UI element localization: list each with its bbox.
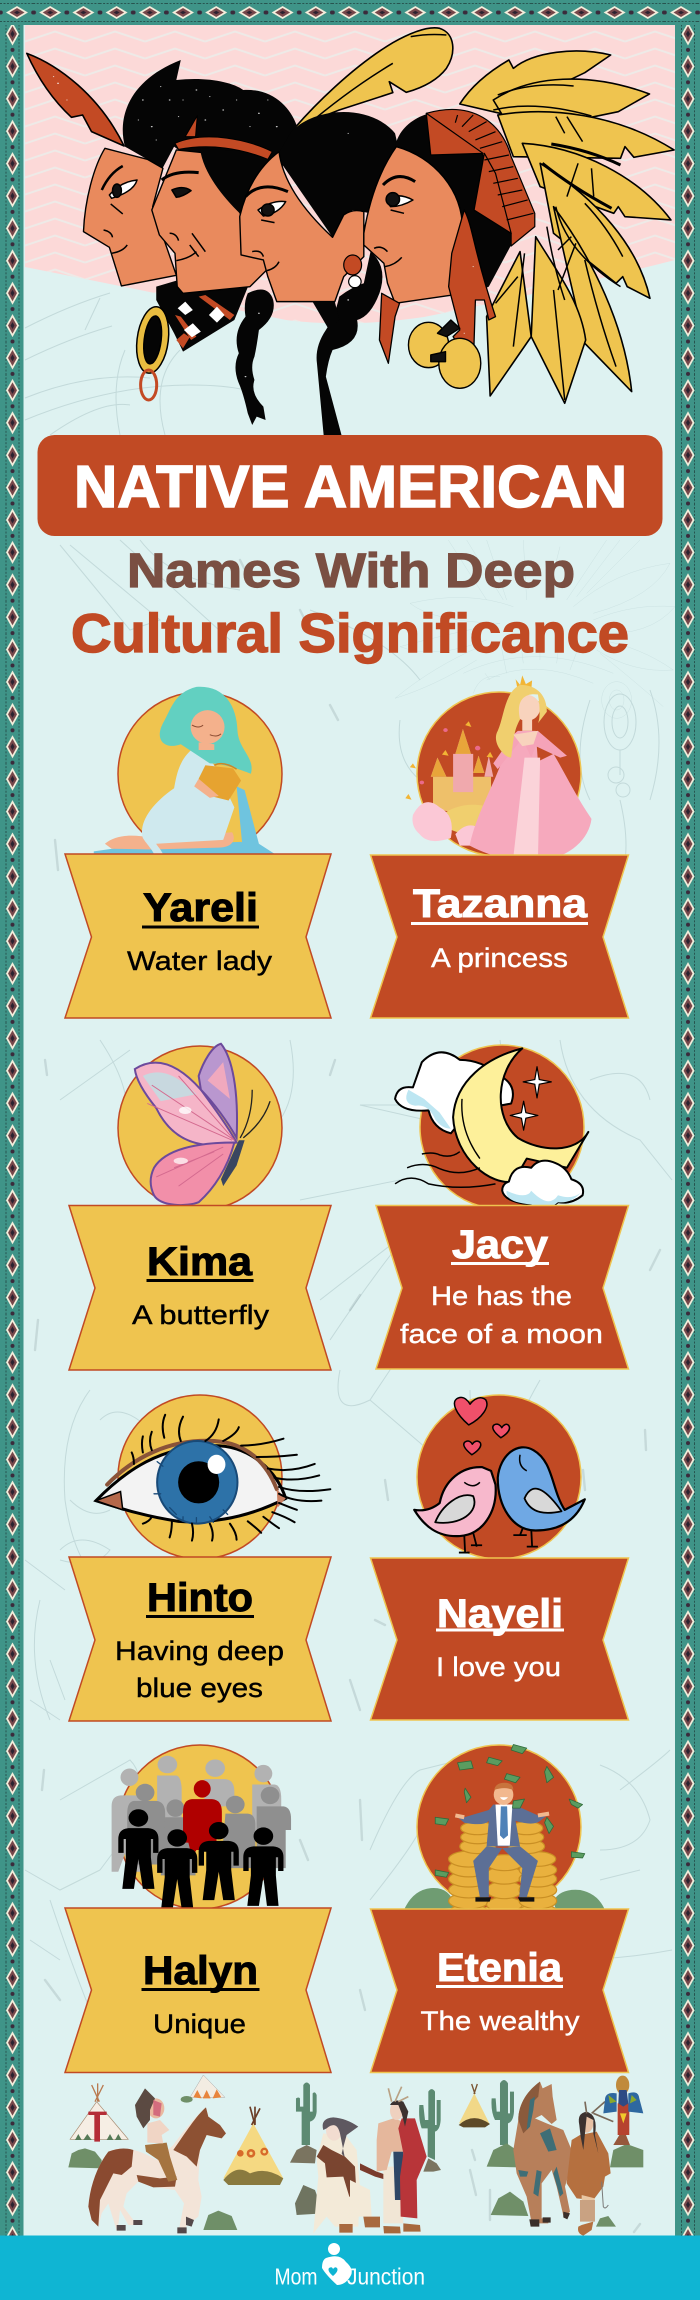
- meaning: He has the face of a moon: He has the: [431, 1281, 572, 1311]
- banner: red: [376, 1206, 628, 1369]
- pale line art and marble texture: [25, 293, 675, 2232]
- second head features: [162, 172, 205, 261]
- first head features: [102, 166, 137, 253]
- cactus right: [491, 2080, 514, 2145]
- shrubs: [487, 2143, 520, 2167]
- braids: [235, 252, 382, 435]
- headband: [175, 116, 272, 159]
- rider: [145, 2143, 177, 2182]
- cactus: [419, 2089, 441, 2160]
- banner: red: [370, 855, 628, 1018]
- decorative frame: top band: [0, 0, 700, 25]
- cactus: [296, 2082, 317, 2145]
- card: Nayeli: [370, 1395, 628, 1720]
- banner: red: [370, 1558, 628, 1720]
- totem pole: [613, 2128, 630, 2145]
- yellow teepee: [223, 2123, 283, 2178]
- icon: love birds: [414, 1397, 585, 1553]
- subtitle line two: Cultural Significance: [71, 602, 629, 664]
- white teepee: [70, 2102, 128, 2139]
- meaning: I love you: I love you: [436, 1652, 561, 1682]
- woman with pup: [313, 2133, 360, 2233]
- banner: yellow: [65, 1908, 331, 2072]
- logo wordmark: Junction: Junction: [347, 2264, 425, 2290]
- fourth face: [364, 147, 467, 303]
- illustration: four native american heads with feathers: [27, 28, 674, 435]
- name: Tazanna: Tazanna: [413, 882, 588, 926]
- title banner: [38, 435, 662, 536]
- logo: MomJunction: [274, 2243, 425, 2290]
- circle: red: [417, 1395, 581, 1559]
- pink zigzag backdrop: [25, 25, 675, 335]
- dry shrub: [295, 2185, 323, 2215]
- fourth head hair: [395, 112, 511, 300]
- meaning: He has the face of a moon: [400, 1281, 603, 1349]
- headdress feathers: [290, 28, 674, 403]
- card: Halyn: [65, 1745, 331, 2072]
- brown horse: [513, 2082, 572, 2223]
- small teepee: [459, 2093, 489, 2123]
- subtitle line one: Names With Deep: [127, 545, 575, 598]
- icon: butterfly: [135, 1044, 270, 1205]
- horse: [88, 2107, 226, 2233]
- circle: yellow: [118, 1745, 282, 1909]
- headdress feather veins: [304, 34, 623, 400]
- name: Halyn: Halyn: [143, 1949, 258, 1993]
- name: Etenia: Etenia: [437, 1946, 563, 1990]
- circle: red: [417, 1745, 581, 1909]
- footer bar: [0, 2236, 700, 2300]
- circle: red: [420, 1045, 584, 1209]
- name: Hinto: Hinto: [147, 1576, 253, 1620]
- meaning: Having deep blue eyes: Having deep: [115, 1636, 284, 1666]
- card: Etenia: [370, 1745, 628, 2072]
- meaning: A butterfly: A butterfly: [132, 1300, 270, 1330]
- second face: [152, 150, 270, 293]
- meaning: The wealthy: The wealthy: [420, 2006, 580, 2036]
- icon: crowd with one red figure: [112, 1756, 291, 1909]
- hanging red feathers: [379, 210, 496, 370]
- decorative frame: left band: [0, 25, 24, 2236]
- first face: [83, 148, 176, 286]
- paint speckles: [53, 76, 474, 377]
- circle: yellow: [118, 692, 282, 856]
- shrubs: [68, 2148, 102, 2168]
- first and second head hair: [123, 60, 297, 220]
- small teepee top: [190, 2075, 225, 2097]
- logo wordmark: Mom: Mom: [274, 2264, 318, 2290]
- rifle: [360, 2163, 407, 2185]
- card: Yareli: [65, 687, 331, 1018]
- name: Jacy: Jacy: [452, 1223, 549, 1267]
- illustration: watercolor scene right: [350, 2076, 643, 2236]
- second head hair wedge: [200, 148, 275, 213]
- yellow disc ornaments: [408, 320, 481, 388]
- third head hair: [277, 112, 404, 237]
- meaning: He has the face of a moon: face of a moon: [400, 1319, 603, 1349]
- icon: water lady: [94, 687, 277, 874]
- name: Yareli: Yareli: [143, 886, 258, 930]
- third face: [240, 152, 364, 302]
- fourth head features: [374, 177, 415, 267]
- name: Nayeli: Nayeli: [437, 1592, 563, 1636]
- icon: princess and castle: [405, 675, 591, 862]
- card: Hinto: [69, 1395, 331, 1721]
- circle: yellow: [118, 1395, 282, 1559]
- native figure with hook: [567, 2132, 611, 2200]
- circle: yellow: [118, 1046, 282, 1210]
- icon: wealthy man on gold coins: [404, 1745, 605, 1920]
- name: Kima: Kima: [147, 1240, 253, 1284]
- meaning: Having deep blue eyes: blue eyes: [136, 1673, 263, 1703]
- necklace and neck: [156, 280, 248, 352]
- title banner: NATIVE AMERICAN: [74, 454, 627, 520]
- icon: crescent moon with clouds: [395, 1048, 588, 1209]
- man: [383, 2167, 403, 2223]
- third head features: [246, 187, 288, 271]
- card: Kima: [69, 1044, 331, 1370]
- meaning: Water lady: Water lady: [127, 946, 273, 976]
- banner: yellow: [65, 854, 331, 1018]
- left red feather: [27, 53, 124, 146]
- circle: red: [417, 692, 581, 856]
- card: Tazanna: [370, 675, 628, 1018]
- banner: yellow: [69, 1206, 331, 1370]
- woman pup rest: [350, 2180, 372, 2217]
- pale war bonnet line art behind the title: [395, 540, 675, 718]
- third head earring: [344, 255, 362, 288]
- icon: blue eye: [96, 1415, 330, 1541]
- round earring ring: [133, 306, 172, 400]
- illustration: watercolor scene left: [68, 2075, 360, 2233]
- striped headdress band: [426, 110, 535, 246]
- banner: red: [370, 1909, 628, 2072]
- card: Jacy: [376, 1045, 628, 1369]
- logo icon: mother and child: [322, 2243, 352, 2285]
- meaning: Unique: Unique: [153, 2009, 246, 2039]
- banner: yellow: [69, 1557, 331, 1721]
- meaning: A princess: A princess: [431, 943, 568, 973]
- meaning: Having deep blue eyes: [115, 1636, 284, 1703]
- decorative frame: right band: [675, 25, 700, 2236]
